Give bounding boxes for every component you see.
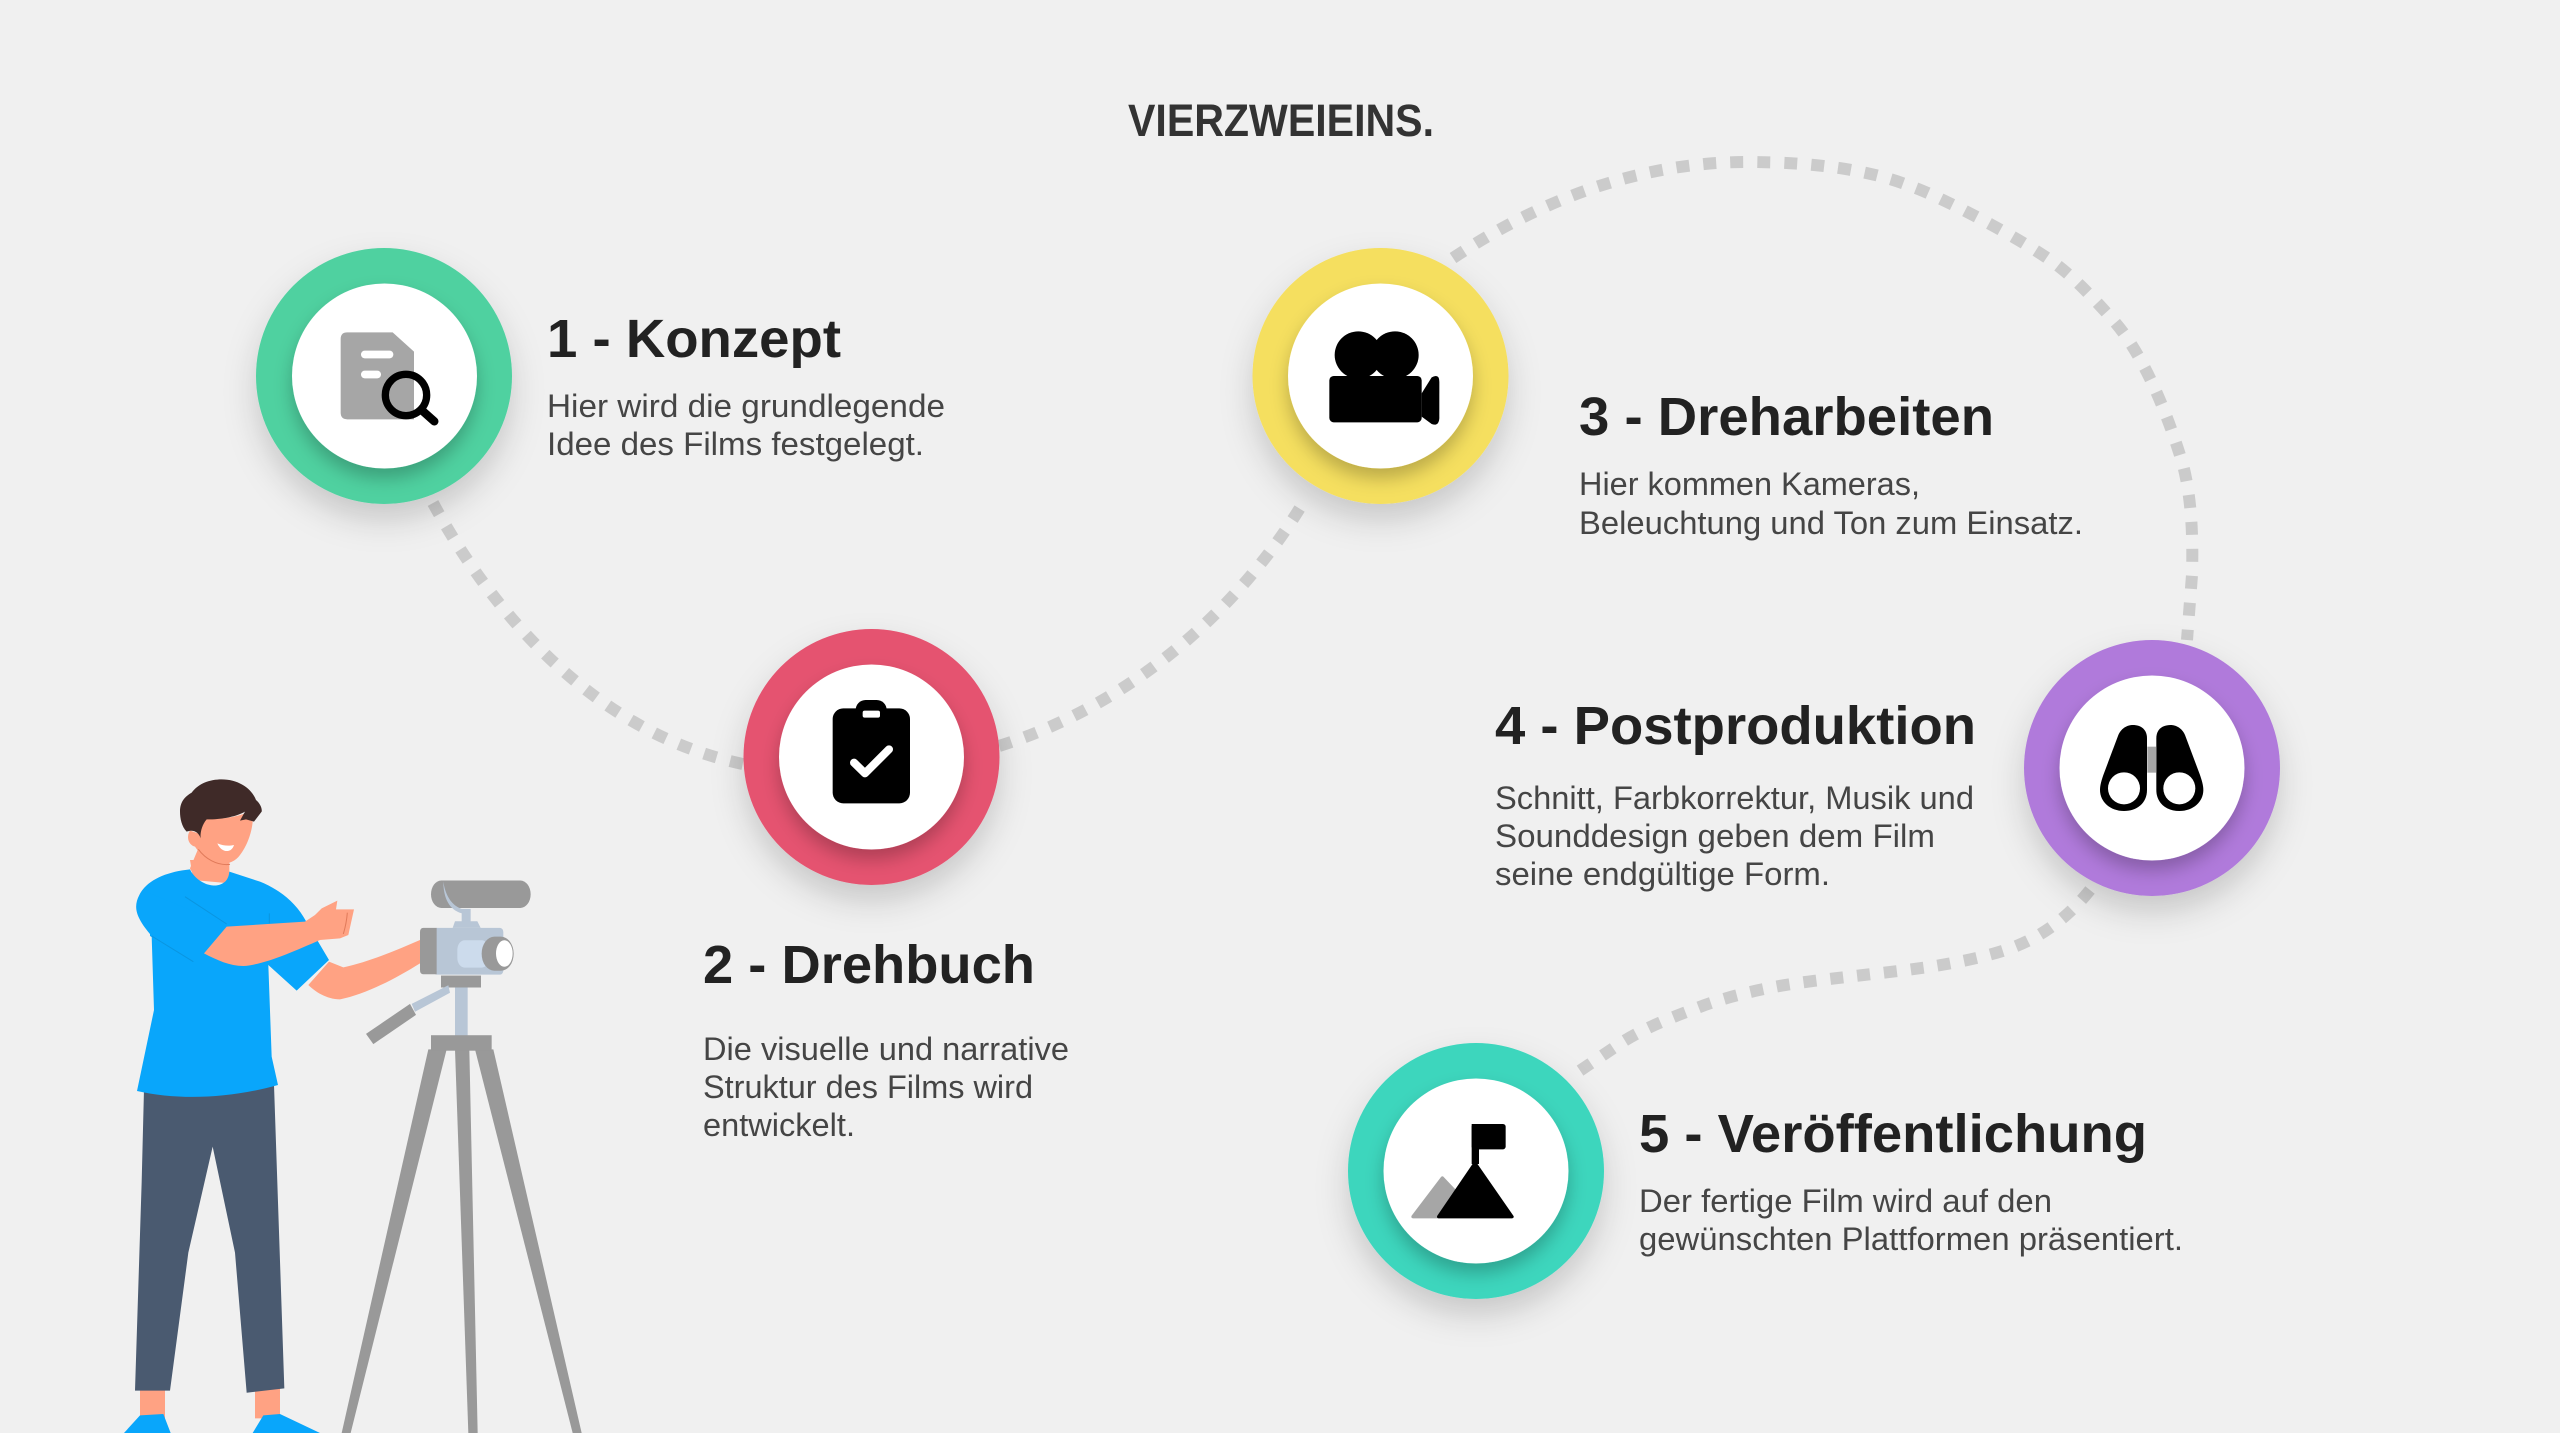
text: step 2: Struktur des Films wird: [703, 1069, 1033, 1105]
text: step 3: [1579, 387, 2083, 541]
tripod: [342, 976, 582, 1433]
text: step 5: [1639, 1104, 2183, 1257]
text: step 4: 4 - Postproduktion: [1495, 696, 1976, 756]
text: step 2: entwickelt.: [703, 1107, 855, 1143]
text: step 5: gewünschten Plattformen präsentiert.: [1639, 1221, 2183, 1257]
text: step 3: Beleuchtung und Ton zum Einsatz.: [1579, 505, 2083, 541]
text: step 1: 1 - Konzept: [547, 309, 841, 369]
text: step 1: [547, 309, 945, 462]
step 1 icon circle: [256, 248, 512, 504]
icon: mountain with flag: [1413, 1124, 1512, 1217]
icon: clipboard with check: [833, 700, 910, 803]
person: head: [180, 779, 262, 881]
dotted connecting path: [433, 162, 2192, 1074]
text: step 4: [1495, 696, 1976, 892]
text: step 2: Die visuelle und narrative: [703, 1031, 1069, 1067]
text: step 2: 2 - Drehbuch: [703, 935, 1035, 995]
step 4 icon circle: [2024, 640, 2280, 896]
text: step 3: Hier kommen Kameras,: [1579, 466, 1920, 502]
icon: document with magnifier: [341, 332, 434, 421]
step 3 icon circle: [1252, 248, 1508, 504]
step 2 icon circle: [744, 629, 1000, 885]
text: step 1: Hier wird die grundlegende: [547, 388, 945, 424]
video camera: [420, 881, 531, 975]
text: step 4: Schnitt, Farbkorrektur, Musik und: [1495, 780, 1974, 816]
text: step 3: 3 - Dreharbeiten: [1579, 387, 1994, 447]
text: step 1: Idee des Films festgelegt.: [547, 426, 924, 462]
text: step 4: Sounddesign geben dem Film: [1495, 818, 1935, 854]
person: legs and shoes: [124, 1085, 320, 1433]
person: torso and arms: [136, 860, 420, 1097]
step 5 icon circle: [1348, 1043, 1604, 1299]
text: step 5: 5 - Veröffentlichung: [1639, 1104, 2147, 1164]
text: step 4: seine endgültige Form.: [1495, 856, 1830, 892]
text: step 2: [703, 935, 1069, 1143]
icon: binoculars: [2100, 725, 2203, 811]
icon: movie camera: [1329, 331, 1439, 425]
title: VIERZWEIEINS.: [1128, 95, 1434, 146]
illustration: camera operator with tripod: [124, 779, 582, 1433]
text: step 5: Der fertige Film wird auf den: [1639, 1183, 2052, 1219]
